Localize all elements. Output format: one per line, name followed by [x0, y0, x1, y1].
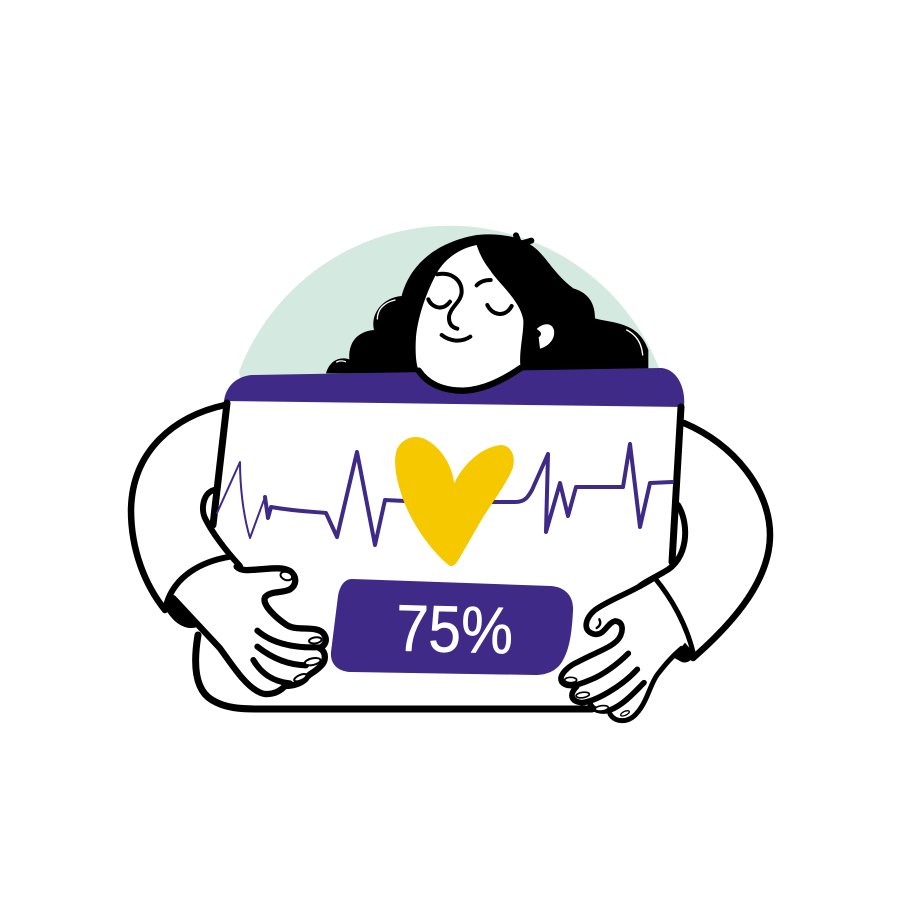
right sleeve curl: [640, 505, 685, 586]
thin ECG segment: [217, 462, 265, 538]
right brow: [477, 280, 491, 285]
mouth: [442, 335, 470, 341]
right cuff shadow: [673, 643, 694, 663]
percentage badge: [331, 579, 573, 675]
medium ECG segment: [265, 452, 405, 545]
nose and brow: [437, 274, 462, 329]
right eye: [487, 305, 512, 314]
right hand outline: [561, 578, 653, 686]
left sleeve curl: [203, 490, 240, 566]
ear: [537, 324, 554, 349]
badge box: [331, 579, 573, 675]
right ECG segment: [490, 444, 672, 532]
hair highlights: [337, 300, 643, 362]
right thumb nail: [597, 619, 600, 628]
left sleeve: [131, 405, 225, 610]
right nails: [565, 677, 577, 683]
left fingers: [253, 631, 319, 683]
chin outline: [419, 368, 521, 391]
ECG line: [217, 444, 672, 545]
heart icon: [395, 437, 514, 566]
background semicircle: [239, 226, 662, 400]
hair tuft: [516, 235, 531, 244]
woman face: [416, 245, 523, 391]
woman head and hair: [326, 234, 648, 373]
left nails: [279, 570, 293, 582]
facial features: [428, 274, 512, 341]
hair: [326, 234, 648, 373]
right arm and hand: [561, 423, 770, 721]
left cuff: [167, 557, 230, 603]
left hand outline: [173, 567, 326, 694]
right cuff: [655, 578, 693, 653]
right sleeve: [684, 423, 770, 658]
face shape: [416, 245, 523, 391]
left eye: [428, 299, 450, 308]
left arm and hand: [131, 405, 326, 694]
right fingers: [572, 669, 637, 703]
left cuff shadow: [165, 598, 198, 628]
monitor frame: [196, 403, 681, 709]
percentage value: 75%: [395, 590, 514, 668]
monitor header band: [224, 368, 684, 407]
